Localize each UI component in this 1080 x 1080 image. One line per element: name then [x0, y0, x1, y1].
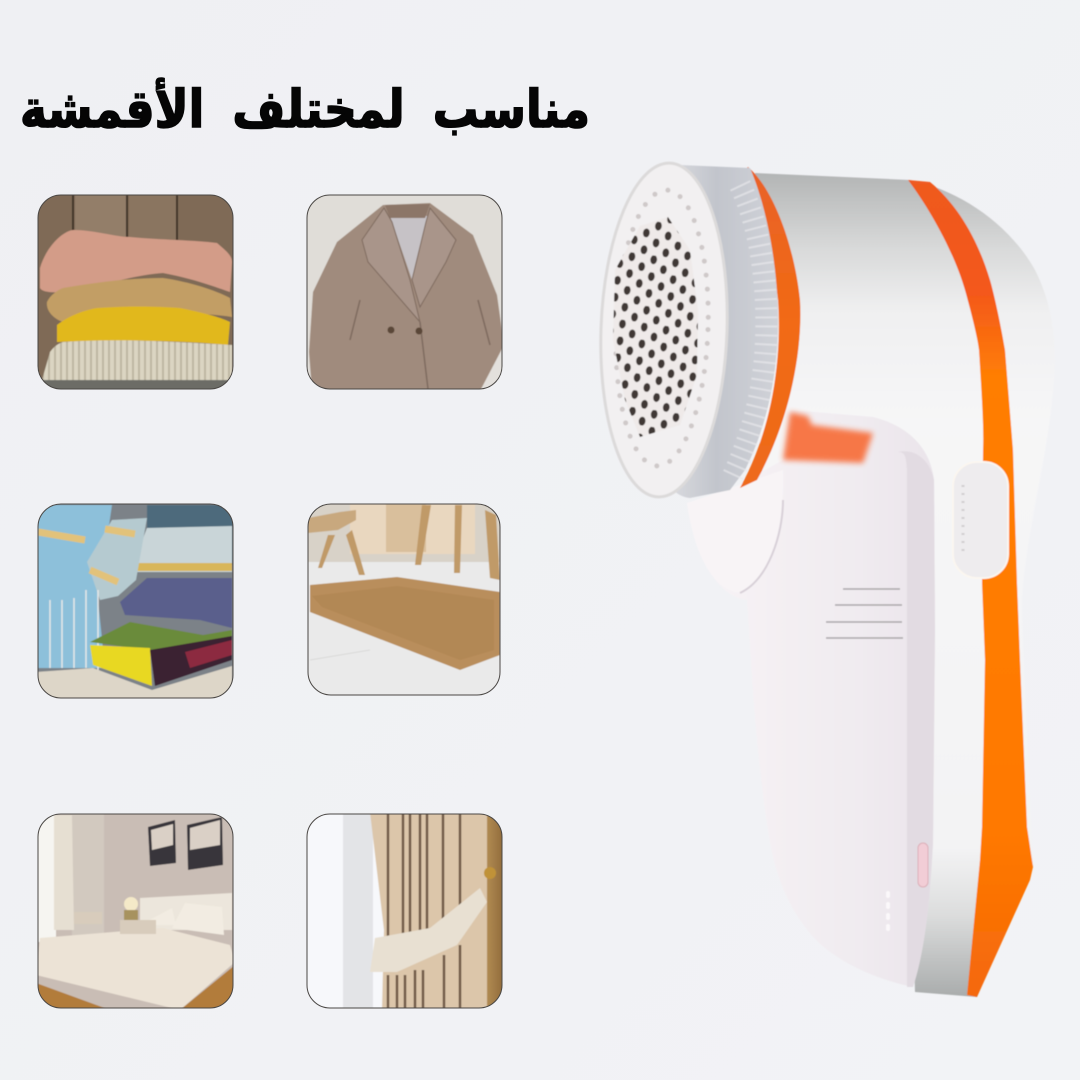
photo frame: bedroom	[38, 814, 233, 1008]
photo frame: sweaters	[38, 195, 233, 389]
orange stripe	[908, 180, 1033, 997]
ribbed ring	[640, 165, 778, 498]
photo: plaid blankets	[36, 502, 235, 700]
round neck	[687, 470, 783, 593]
photo: wool coat	[305, 193, 504, 391]
device shell	[755, 173, 1055, 997]
vents	[826, 589, 903, 638]
lower grip	[687, 410, 935, 987]
orange collar	[740, 167, 800, 488]
mesh	[613, 217, 698, 437]
switch	[953, 462, 1008, 578]
indicator dots	[886, 893, 890, 930]
photo: curtain with tie-back	[344, 814, 502, 1008]
photo: jute rug	[306, 502, 502, 697]
product: lint remover	[595, 161, 1055, 997]
photo: bedroom	[36, 812, 235, 1010]
photo: folded sweaters	[36, 193, 235, 391]
cover dot ring	[611, 188, 713, 468]
title: مناسب لمختلف الأقمشة	[20, 77, 590, 140]
ring ribs	[732, 185, 766, 478]
translucent orange window	[783, 412, 873, 463]
photo frame: rug	[308, 504, 500, 695]
photo frame: coat	[307, 195, 502, 389]
cover face	[595, 161, 733, 499]
indicator light	[918, 843, 928, 887]
photo frame: blankets	[38, 504, 233, 698]
grip side strip	[898, 451, 935, 987]
photo frame: curtain	[307, 814, 502, 1008]
